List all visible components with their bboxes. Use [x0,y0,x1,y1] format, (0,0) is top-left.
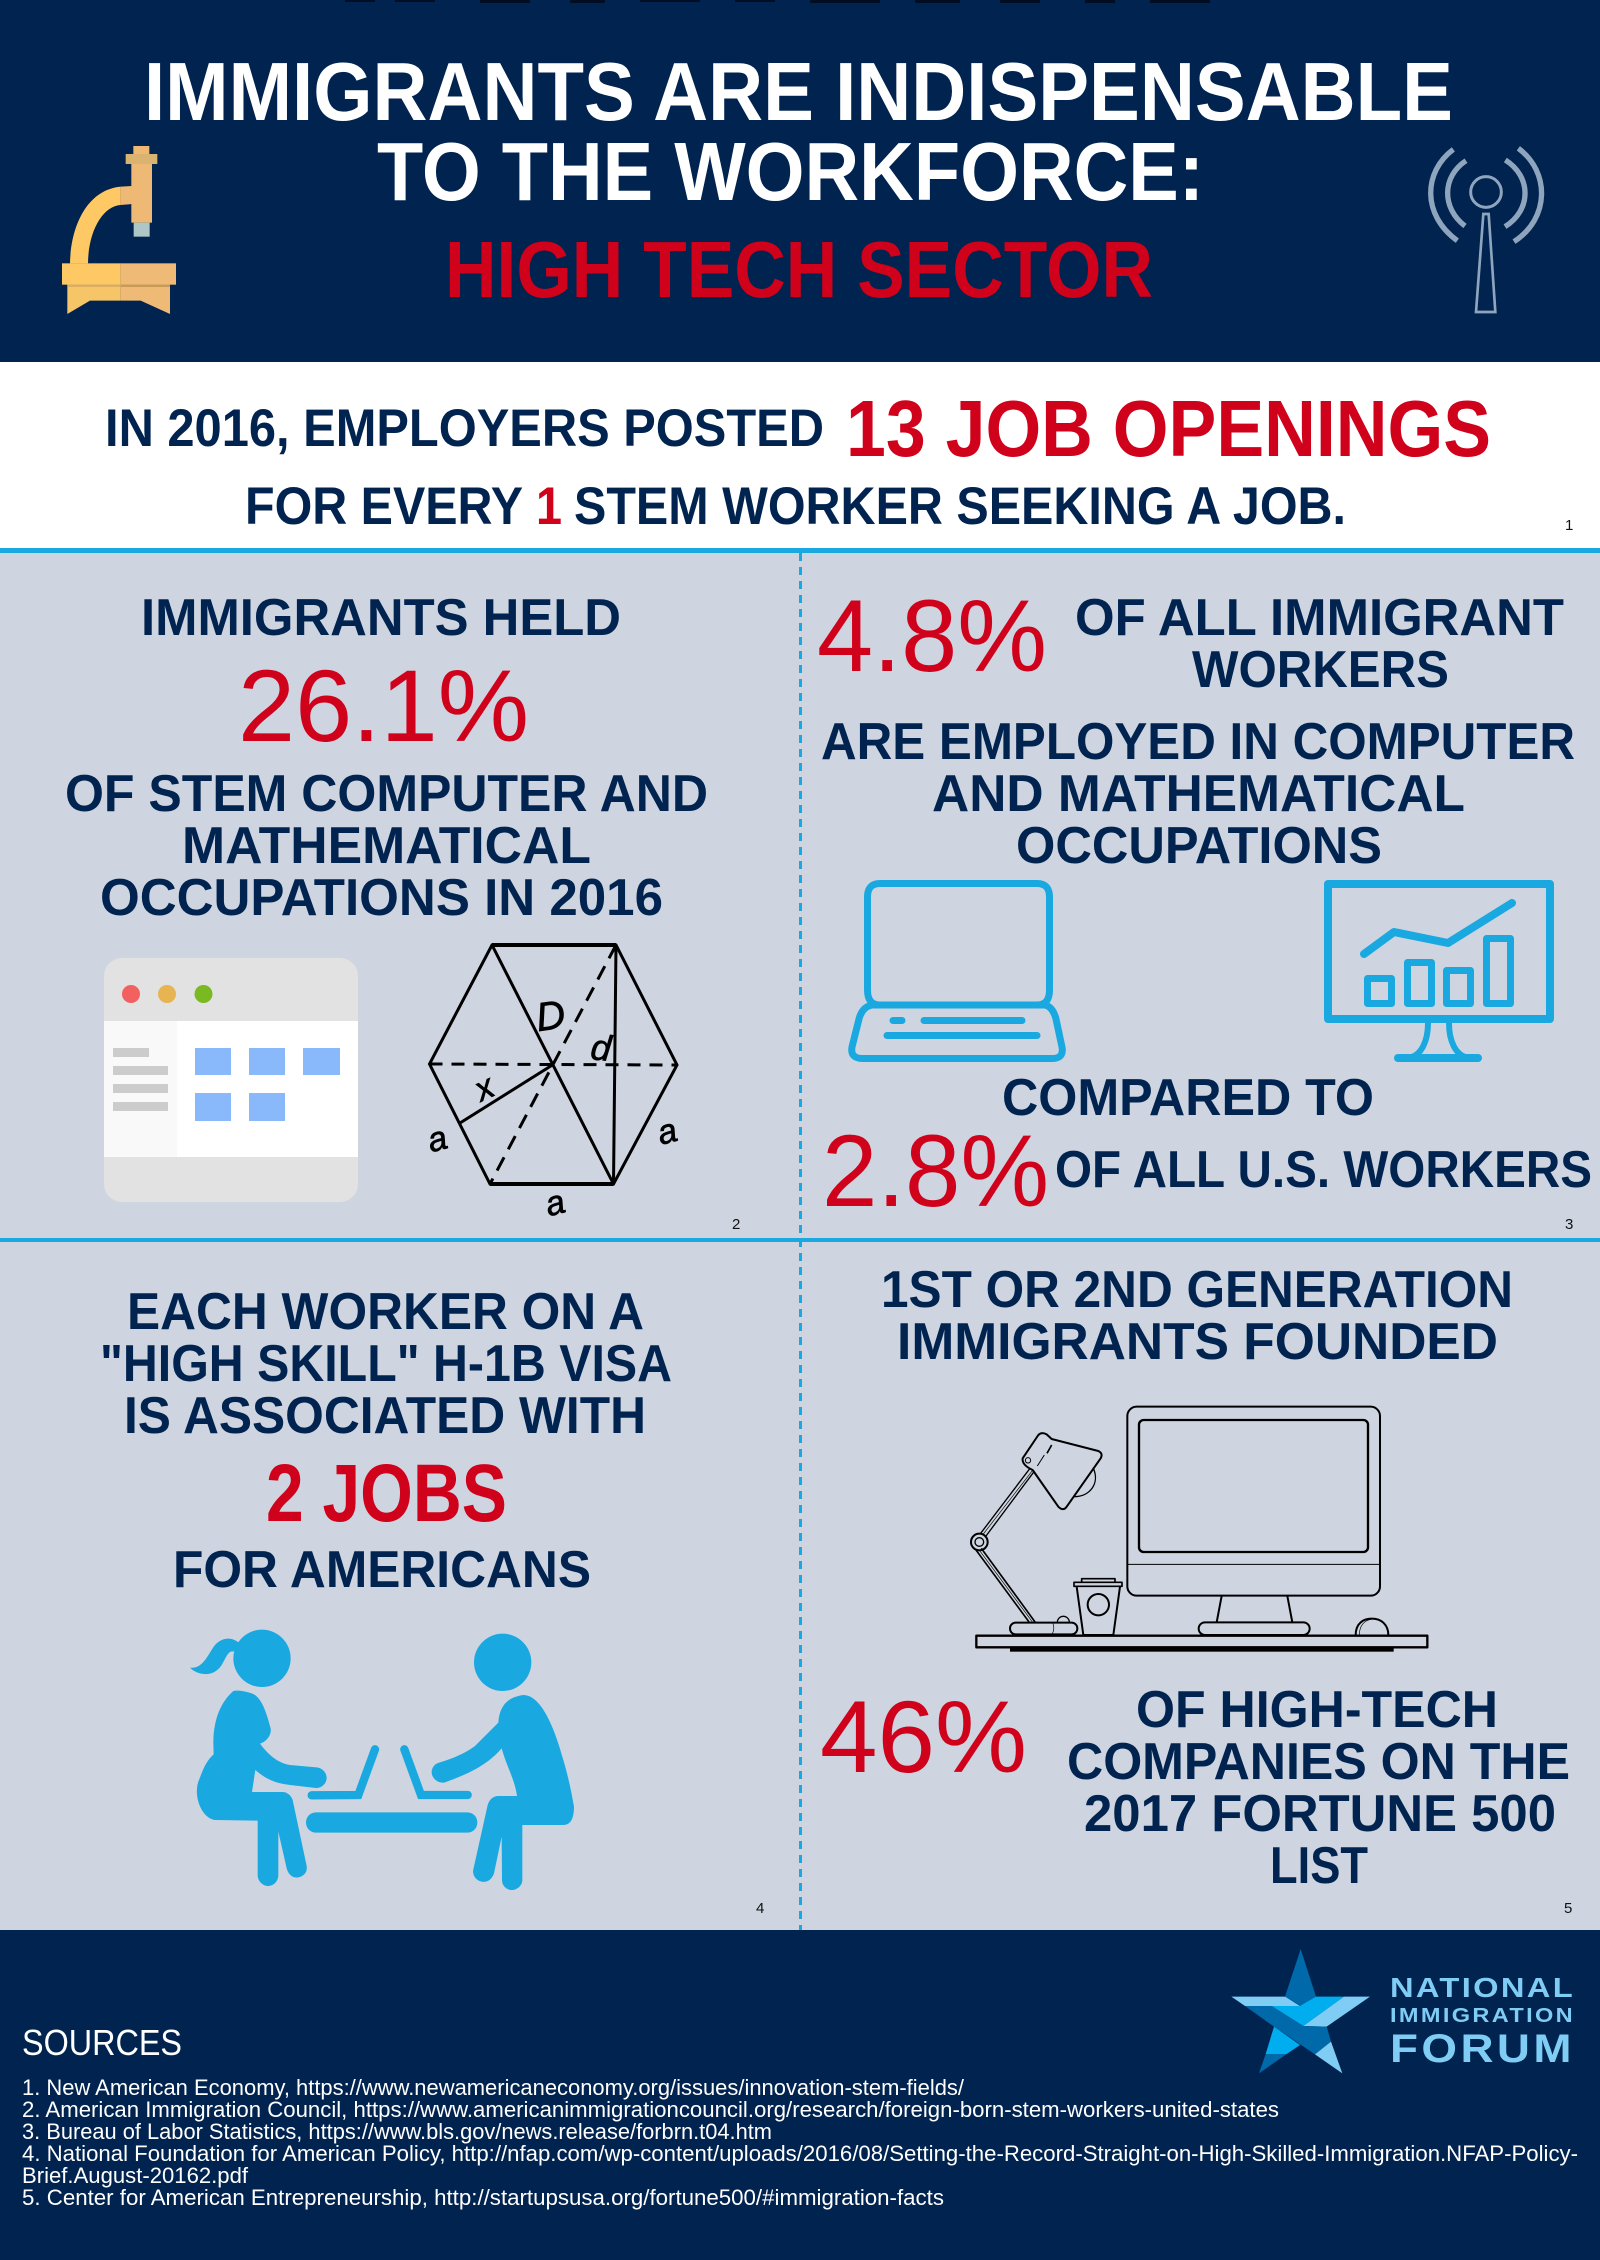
text: occupations: OCCUPATIONS IN 2016 [100,869,663,927]
header banner [0,0,1600,362]
icon: star [1231,1949,1370,2073]
footer [0,1930,1600,2260]
panel: 4.8% versus 2.8% [817,579,1592,1233]
icon: monitor with chart [1328,884,1550,1058]
text: each worker on H-1B visa: EACH WORKER ON A [127,1283,644,1341]
text: source list: 3. Bureau of Labor Statistics, https://www.bls.gov/news.release/forbrn.t04.htm [22,2119,772,2144]
logo: national immigration forum [1231,1949,1575,2073]
icon: hexagon diagram: a [541,1183,569,1224]
text: fortune 500 companies: COMPANIES ON THE [1067,1733,1570,1791]
icon: browser window [104,958,358,1202]
panel: job openings statement: FOR EVERY [245,477,523,536]
text: compared to: COMPARED TO [1002,1069,1374,1127]
text: occupations: OF STEM COMPUTER AND [65,765,708,823]
panel: founders 46%: 5 [1564,1900,1572,1917]
text: occupations [65,765,708,927]
stat: 4.8%: 4.8% [817,579,1047,693]
panel: founders 46% [820,1261,1572,1917]
panel: job openings statement: IN 2016, EMPLOYERS POSTED [105,399,824,458]
stat: 2.8%: 2.8% [822,1114,1049,1228]
text: of all immigrant workers: OF ALL IMMIGRANT [1075,589,1564,647]
heading: immigrants held: IMMIGRANTS HELD [141,589,621,647]
text: each worker on H-1B visa [100,1283,672,1445]
icon: antenna [1431,148,1542,312]
icon: hexagon diagram: a [653,1111,681,1153]
title: IMMIGRANTS ARE INDISPENSABLE [144,45,1453,138]
panel: immigrants held 26.1% [65,589,740,1233]
text: of all immigrant workers: WORKERS [1192,641,1449,699]
text: source list: 1. New American Economy, https://www.newamericaneconomy.org/issues/innovation-stem-fields/ [22,2075,965,2100]
text: fortune 500 companies: 2017 FORTUNE 500 [1084,1785,1556,1843]
icon: hexagon diagram: D [533,993,568,1040]
title: HIGH TECH SECTOR [445,225,1153,314]
stat: 2 jobs: 2 JOBS [266,1448,507,1539]
icon: laptop [852,884,1062,1058]
text: occupations: MATHEMATICAL [182,817,591,875]
logo: national immigration forum: NATIONAL [1390,1972,1575,2003]
text: fortune 500 companies [1067,1681,1570,1895]
text: fortune 500 companies: LIST [1270,1837,1368,1895]
panel: 4.8% versus 2.8%: 3 [1565,1216,1573,1233]
stat: 46%: 46% [820,1680,1027,1794]
panel: H-1B jobs [100,1283,764,1917]
panel grid background [0,553,1600,1930]
logo: national immigration forum: FORUM [1390,2027,1575,2071]
text: each worker on H-1B visa: IS ASSOCIATED WITH [124,1387,646,1445]
panel: job openings statement: STEM WORKER SEEKING A JOB. [574,477,1346,536]
panel: job openings statement: 13 JOB OPENINGS [846,384,1491,473]
icon: two people at laptops [190,1630,574,1890]
logo: national immigration forum: IMMIGRATION [1390,2005,1575,2027]
text: employed in computer occupations: ARE EMPLOYED IN COMPUTER [821,713,1575,771]
panel: job openings statement [0,362,1600,548]
text: generation immigrants founded: IMMIGRANTS FOUNDED [897,1313,1498,1371]
text: employed in computer occupations: OCCUPATIONS [1016,817,1382,875]
text: source list: 5. Center for American Entrepreneurship, http://startupsusa.org/fortune500/#immigration-facts [22,2185,944,2210]
text: employed in computer occupations [821,713,1575,875]
text: fortune 500 companies: OF HIGH-TECH [1136,1681,1498,1739]
text: generation immigrants founded [881,1261,1513,1371]
text: employed in computer occupations: AND MATHEMATICAL [932,765,1465,823]
text: for americans: FOR AMERICANS [173,1541,591,1599]
text: source list [22,2075,1578,2210]
panel: immigrants held 26.1%: 2 [732,1216,740,1233]
title: TO THE WORKFORCE: [377,125,1204,218]
panel: H-1B jobs: 4 [756,1900,764,1917]
icon: desk with computer and lamp [971,1407,1427,1652]
stat: 26.1%: 26.1% [238,649,529,763]
panel: job openings statement: 1 [536,477,562,536]
icon: hexagon diagram [423,945,681,1224]
icon: microscope [62,146,176,314]
text: source list: 4. National Foundation for American Policy, http://nfap.com/wp-content/uploads/2016/08/Setting-the-Record-Straight-on-High-Skilled-Immigration.NFAP-Policy- [22,2141,1578,2166]
text: generation immigrants founded: 1ST OR 2ND GENERATION [881,1261,1513,1319]
panel: job openings statement: 1 [1565,517,1573,534]
title [144,45,1453,314]
icon: hexagon diagram: d [589,1026,614,1069]
text: each worker on H-1B visa: "HIGH SKILL" H-1B VISA [100,1335,672,1393]
icon: hexagon diagram: a [423,1119,451,1160]
heading: sources: SOURCES [22,2022,182,2063]
text: source list: 2. American Immigration Council, https://www.americanimmigrationcouncil.org/research/foreign-born-stem-workers-united-states [22,2097,1279,2122]
text: source list: Brief.August-20162.pdf [22,2163,249,2188]
text: of all immigrant workers [1075,589,1564,699]
icon: hexagon diagram: x [467,1067,501,1110]
